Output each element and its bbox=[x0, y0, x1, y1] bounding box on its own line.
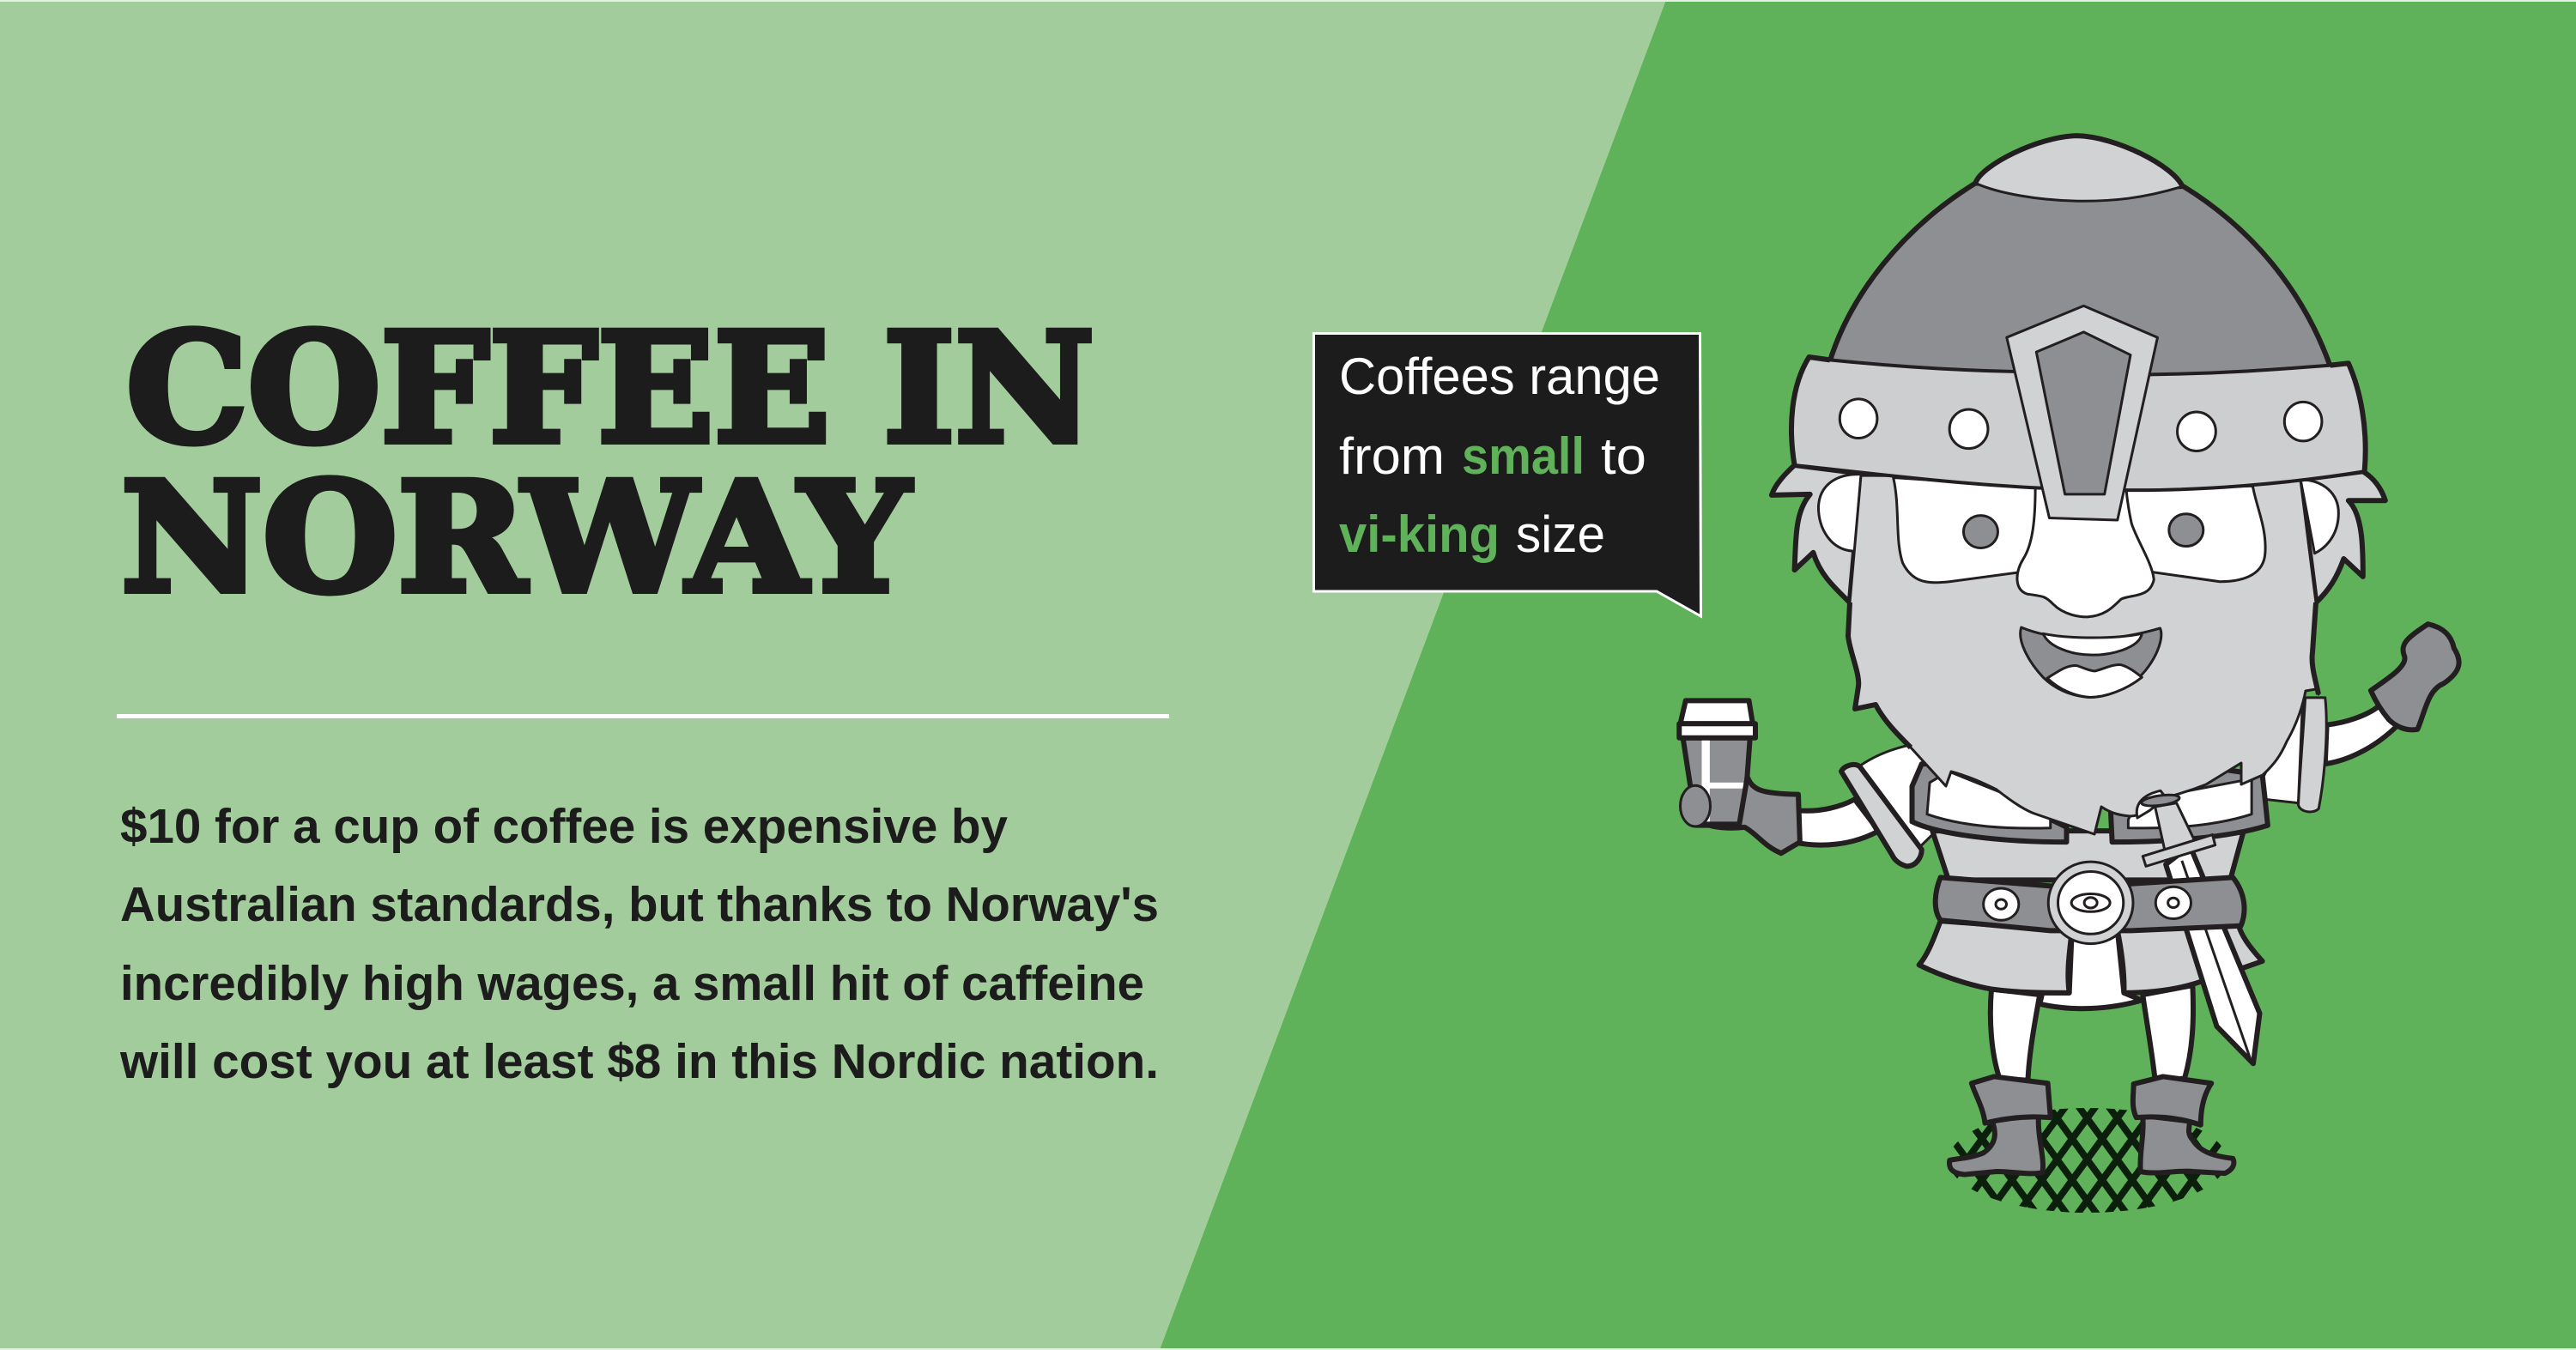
body text bbox=[119, 799, 1159, 1089]
left shoulder strap bbox=[1841, 765, 1922, 866]
title: COFFEE IN bbox=[126, 300, 1094, 477]
right eye bbox=[2111, 486, 2265, 582]
callout: speech bubble: from bbox=[1339, 427, 1445, 485]
boots bbox=[1949, 1076, 2234, 1174]
viking body bbox=[1679, 698, 2398, 1174]
divider rule bbox=[117, 714, 1169, 718]
title: NORWAY bbox=[121, 449, 912, 627]
callout: speech bubble: small bbox=[1462, 427, 1585, 485]
illustration: viking holding coffee bbox=[1679, 136, 2459, 1213]
skirt bbox=[1919, 921, 2263, 1008]
belt bbox=[1936, 862, 2245, 944]
legs bbox=[1991, 985, 2193, 1081]
ear left bbox=[1818, 475, 1861, 551]
helmet brim bbox=[1791, 357, 2366, 490]
tunic torso bbox=[1932, 831, 2244, 880]
body text: will cost you at least $8 in this Nordic nation. bbox=[119, 1034, 1159, 1089]
hair left bbox=[1772, 465, 1861, 602]
helmet dome bbox=[1830, 183, 2331, 395]
right collar bbox=[2111, 764, 2268, 842]
left eye bbox=[1894, 478, 2053, 583]
coffee cup bbox=[1679, 700, 1755, 826]
left glove bbox=[1681, 777, 1800, 853]
left collar bbox=[1912, 764, 2067, 842]
callout: speech bubble: to bbox=[1601, 427, 1646, 485]
body text: incredibly high wages, a small hit of caffeine bbox=[120, 956, 1144, 1011]
shadow: hatched ellipse bbox=[1949, 1108, 2227, 1213]
callout: speech bubble: vi-king bbox=[1339, 505, 1500, 563]
callout: speech bubble: Coffees range bbox=[1339, 348, 1660, 405]
helmet knob bbox=[1975, 136, 2183, 201]
sword blade bbox=[2166, 846, 2259, 1063]
body text: $10 for a cup of coffee is expensive by bbox=[120, 799, 1008, 854]
left arm bbox=[1793, 799, 1879, 845]
left sleeve bbox=[1860, 745, 1932, 848]
face details bbox=[1791, 136, 2366, 697]
helmet nose guard bbox=[2007, 306, 2157, 520]
right sleeve bbox=[2263, 700, 2302, 803]
callout: speech bubble: size bbox=[1516, 505, 1605, 563]
viking head bbox=[1772, 465, 2459, 729]
title bbox=[121, 300, 1094, 627]
background: light green diagonal panel bbox=[0, 0, 1666, 1350]
ear right bbox=[2300, 480, 2338, 554]
right arm bbox=[2325, 706, 2398, 764]
nose bbox=[2017, 488, 2154, 617]
body text: Australian standards, but thanks to Norway's bbox=[120, 877, 1159, 932]
hair right bbox=[2300, 471, 2385, 602]
beard bbox=[1848, 475, 2318, 834]
callout: speech bubble bbox=[1313, 333, 1701, 616]
right shoulder strap bbox=[2299, 698, 2326, 812]
right glove bbox=[2371, 624, 2459, 729]
sword hilt bbox=[2137, 790, 2215, 866]
mouth bbox=[2021, 627, 2161, 697]
